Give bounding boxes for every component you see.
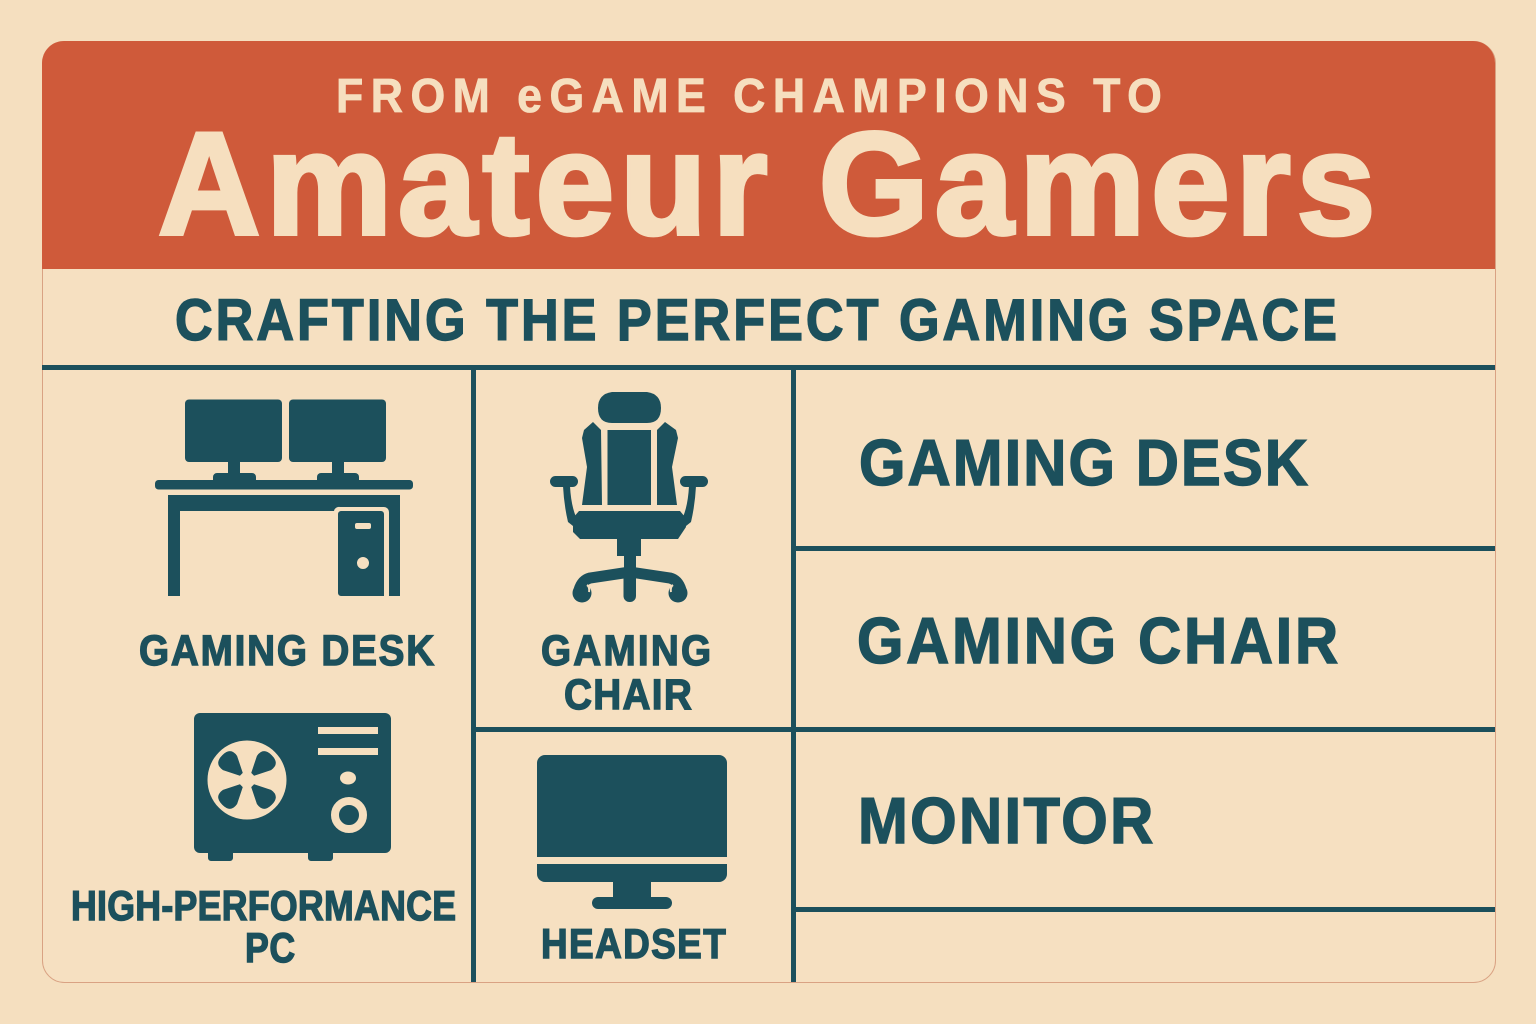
- table grid lines: [42, 365, 1495, 982]
- label: gaming chair: CHAIR: [564, 670, 692, 718]
- title: main: Amateur Gamers: [158, 103, 1375, 265]
- label: gaming desk: GAMING DESK: [139, 626, 435, 674]
- header banner: [42, 41, 1495, 269]
- label: headset: HEADSET: [541, 921, 726, 968]
- list item: gaming desk: GAMING DESK: [859, 427, 1308, 500]
- label: high-performance pc: [71, 883, 456, 972]
- label: high-performance pc: HIGH-PERFORMANCE: [71, 883, 456, 930]
- list item: monitor: MONITOR: [858, 785, 1153, 858]
- icon: gaming chair: [550, 392, 708, 602]
- label: high-performance pc: PC: [245, 925, 295, 972]
- title: kicker: FROM eGAME CHAMPIONS TO: [336, 69, 1162, 122]
- icon: gaming desk: [155, 400, 413, 596]
- icon: monitor: [537, 755, 727, 909]
- icon: high-performance pc: [194, 713, 391, 861]
- label: gaming chair: [541, 626, 711, 718]
- label: gaming chair: GAMING: [541, 626, 711, 674]
- subtitle: CRAFTING THE PERFECT GAMING SPACE: [175, 287, 1337, 353]
- list item: gaming chair: GAMING CHAIR: [857, 605, 1338, 678]
